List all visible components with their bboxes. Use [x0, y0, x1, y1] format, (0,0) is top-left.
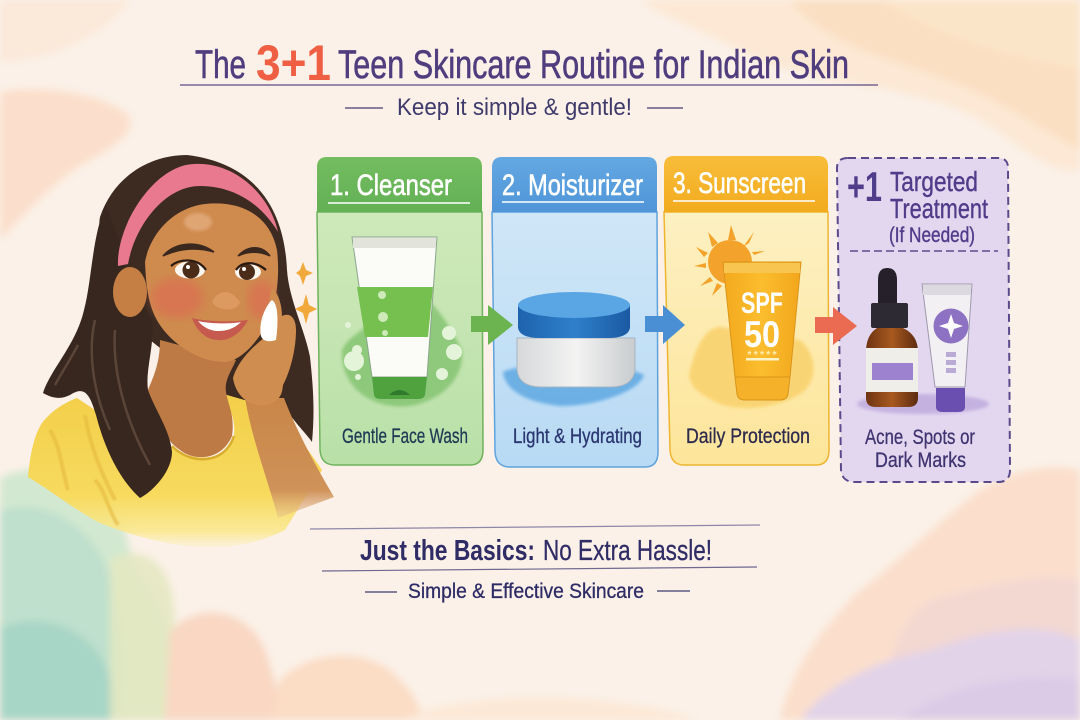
icon: bubbles — [344, 322, 462, 380]
left eyebrow — [163, 244, 214, 256]
illustration: teen girl applying foam — [28, 155, 334, 547]
icon: foam splash — [342, 297, 462, 407]
right eyebrow — [238, 248, 270, 256]
title: 3+1 — [256, 35, 331, 91]
nose — [212, 292, 240, 310]
footer subtitle: Simple & Effective Skincare — [408, 580, 644, 603]
caption: Light & Hydrating — [513, 425, 642, 448]
arrow: cleanser to moisturizer — [471, 305, 513, 345]
icon: sunscreen tube: ★★★★★ — [746, 349, 778, 357]
heading: 3. Sunscreen — [673, 167, 806, 200]
foam — [260, 300, 277, 341]
heading: targeted treatment: (If Needed) — [889, 224, 975, 247]
right eye — [235, 263, 266, 280]
heading: targeted treatment: Treatment — [890, 193, 988, 224]
forehead highlight — [184, 213, 212, 231]
heading: plus one: +1 — [847, 163, 882, 210]
ear — [113, 267, 147, 317]
caption: Daily Protection — [686, 425, 810, 448]
panel: cleanser — [317, 157, 483, 465]
icon: dropper bottle — [866, 268, 918, 407]
collar line — [172, 436, 234, 459]
heading: targeted treatment: Targeted — [890, 166, 978, 197]
shirt — [28, 393, 322, 547]
front hair — [43, 205, 172, 498]
icon: sun — [694, 225, 765, 296]
icon: water splash — [503, 365, 644, 406]
heading: 2. Moisturizer — [502, 169, 643, 202]
shirt shading — [50, 415, 118, 525]
hair highlights — [55, 320, 150, 465]
title — [180, 35, 878, 91]
icon: treatment tube — [922, 284, 972, 412]
heading: targeted treatment — [889, 166, 988, 247]
headband — [118, 164, 278, 266]
footer heading: Just the Basics: — [360, 535, 535, 567]
cheeks — [151, 278, 203, 318]
icon: sunscreen tube: SPF — [741, 287, 783, 320]
icon: sunscreen tube — [723, 262, 801, 400]
hair back — [99, 155, 313, 442]
panel: targeted treatment — [837, 158, 1010, 482]
caption — [865, 426, 975, 472]
icon: shadow — [857, 394, 989, 414]
mouth — [192, 318, 248, 340]
title: The — [195, 43, 246, 87]
left eye — [171, 260, 206, 278]
heading: 1. Cleanser — [330, 169, 452, 202]
forearm — [245, 398, 334, 518]
caption: Dark Marks — [875, 449, 966, 472]
panel: moisturizer — [492, 157, 658, 467]
footer heading — [310, 525, 760, 571]
panel: sunscreen — [664, 156, 829, 465]
sparkles — [295, 262, 317, 324]
subtitle: Keep it simple & gentle! — [397, 94, 632, 121]
icon: cream jar — [517, 292, 635, 387]
hand — [233, 288, 296, 406]
arrow: moisturizer to sunscreen — [645, 305, 685, 344]
icon: cleanser tube — [352, 237, 437, 399]
neck — [147, 340, 236, 457]
caption: Acne, Spots or — [865, 426, 975, 449]
footer heading: No Extra Hassle! — [543, 535, 712, 567]
icon: sunscreen tube: 50 — [744, 314, 780, 355]
icon: splash — [689, 327, 814, 408]
caption: Gentle Face Wash — [342, 425, 468, 448]
arrow: sunscreen to treatment — [815, 307, 857, 345]
face — [145, 203, 278, 362]
title: Teen Skincare Routine for Indian Skin — [338, 43, 849, 87]
